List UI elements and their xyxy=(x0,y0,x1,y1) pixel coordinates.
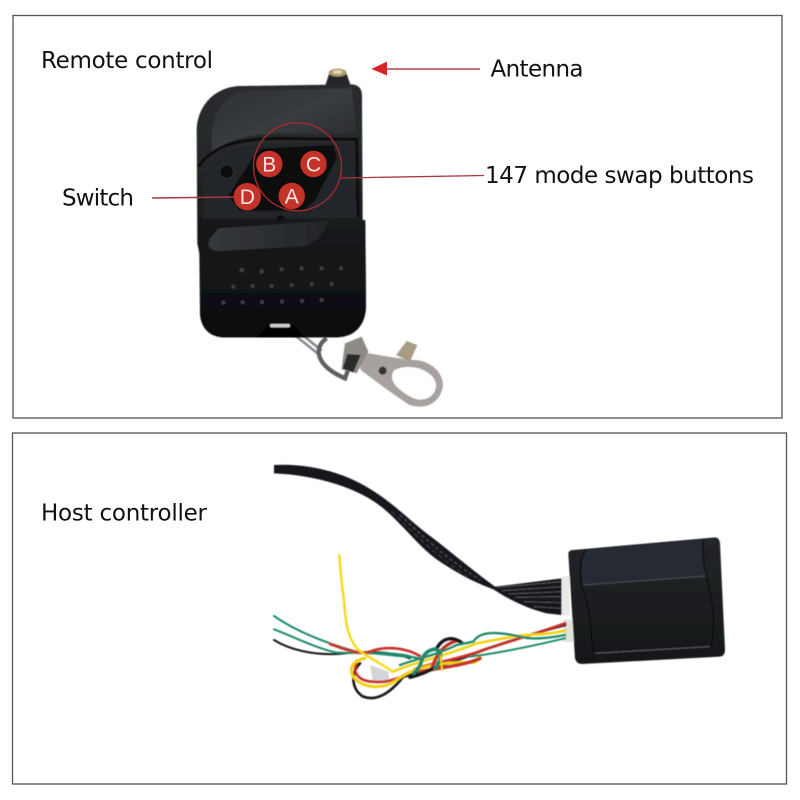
small led dot xyxy=(277,215,285,220)
speaker dots xyxy=(221,266,343,305)
connector xyxy=(562,576,575,642)
yellow wire to connector xyxy=(393,631,565,672)
black twist xyxy=(410,639,462,677)
label: antenna: Antenna xyxy=(490,56,584,82)
green knot xyxy=(413,649,440,673)
button B: B xyxy=(262,154,276,176)
barrel shadow xyxy=(343,354,361,372)
swivel loop xyxy=(319,338,352,378)
clasp opening xyxy=(392,367,436,400)
black wire xyxy=(274,640,410,658)
connector plug xyxy=(370,665,390,683)
long yellow wire xyxy=(339,555,393,672)
black loop xyxy=(353,625,565,698)
red twist xyxy=(420,641,480,672)
green wire upper xyxy=(274,616,420,658)
split ring xyxy=(293,330,322,354)
panel frame xyxy=(13,16,782,418)
red loop lower xyxy=(355,623,565,682)
green wire lower xyxy=(274,629,417,658)
button B xyxy=(256,151,282,177)
button D xyxy=(234,183,261,210)
clasp hole xyxy=(379,367,387,375)
heading: host controller: Host controller xyxy=(41,500,208,526)
case top face xyxy=(582,540,707,585)
ribbon cable xyxy=(274,465,562,615)
indicator hole xyxy=(220,165,234,179)
lower shell xyxy=(200,220,366,337)
label: mode swap buttons: 147 mode swap buttons xyxy=(485,163,754,189)
leader line: mode swap buttons xyxy=(341,176,484,178)
upper shell highlight xyxy=(212,88,357,153)
side face xyxy=(203,143,357,218)
button C: C xyxy=(306,154,321,176)
antenna xyxy=(325,69,351,85)
leader line: switch xyxy=(152,197,236,198)
arrow: antenna xyxy=(372,62,480,76)
button D: D xyxy=(240,186,255,209)
button recess xyxy=(228,145,337,211)
yellow knot strand xyxy=(441,656,442,670)
coloured wires xyxy=(274,555,565,698)
button A: A xyxy=(285,186,299,208)
heading: remote control: Remote control xyxy=(41,48,213,74)
remote control photo xyxy=(197,69,366,337)
label: switch: Switch xyxy=(62,186,134,212)
shell seam xyxy=(198,138,358,217)
button C xyxy=(300,151,327,177)
panel: remote control xyxy=(13,16,782,418)
thumb lever xyxy=(396,341,417,362)
green wire lower right xyxy=(470,638,565,657)
green wire top right xyxy=(400,633,565,665)
remote body xyxy=(197,84,366,337)
highlight circle around buttons xyxy=(254,123,342,211)
panel: host controller xyxy=(12,433,786,784)
ribbon wire highlights xyxy=(392,512,562,608)
clasp body xyxy=(358,352,443,407)
panel frame xyxy=(12,433,786,784)
ribbon cable and case photo xyxy=(274,465,725,664)
grip ridges xyxy=(208,221,328,251)
key ring slot xyxy=(256,324,305,337)
swivel barrel xyxy=(342,337,368,373)
button A xyxy=(278,183,305,209)
key ring and clasp xyxy=(293,330,443,407)
red loop upper xyxy=(330,644,420,656)
case lines xyxy=(580,539,713,658)
controller case xyxy=(568,537,725,664)
yellow loop lower xyxy=(351,656,480,687)
